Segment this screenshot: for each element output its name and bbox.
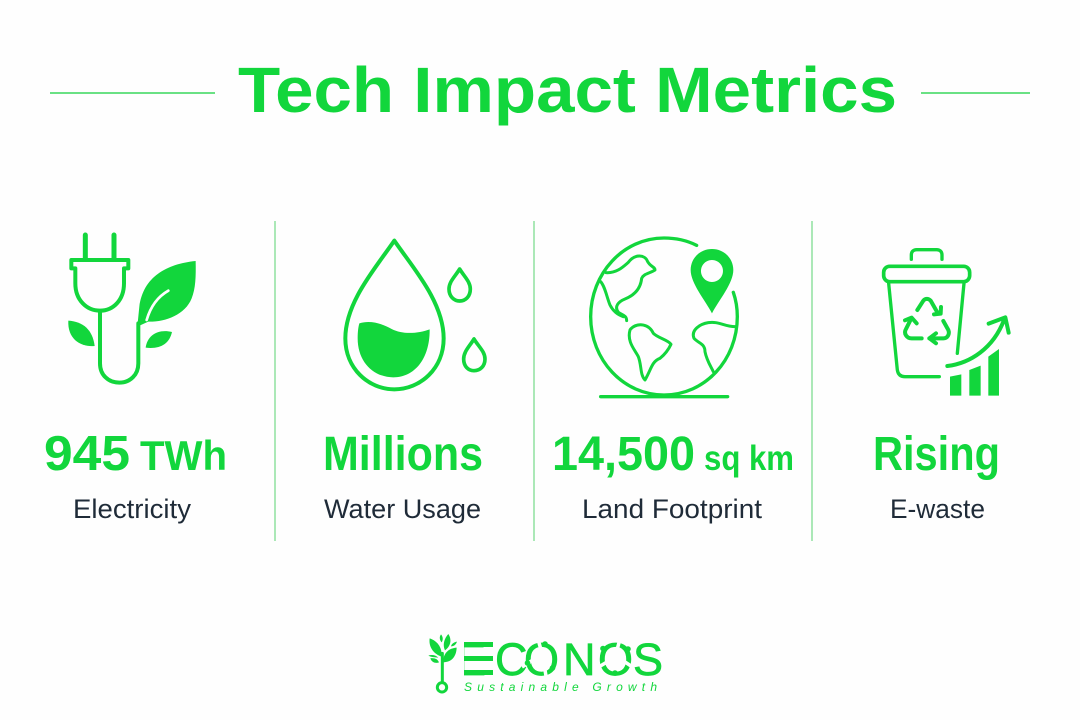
metric: electricity [44,427,227,524]
metric: land footprint [552,428,794,524]
logo wordmark: ECONOS [456,634,663,685]
logo tagline: Sustainable Growth [464,680,657,694]
metric: electricity: TWh [140,432,227,479]
metric: land footprint: 14,500 [552,428,695,481]
icon: recycling bin with rising chart [884,250,1009,396]
icon: water drops [345,241,485,389]
metric: electricity: 945 [44,427,130,481]
metric: e-waste [873,428,1000,524]
metric: water usage: Water Usage [324,494,481,524]
icon: plug with leaves [68,235,196,383]
metric: water usage: Millions [323,428,483,481]
metric: electricity: Electricity [73,494,192,524]
logo icon: sprout [428,634,457,692]
title: Tech Impact Metrics [238,54,897,126]
logo: Econos [428,634,663,694]
metric: water usage [323,428,483,524]
metric: land footprint: sq km [704,439,794,478]
metric: e-waste: Rising [873,428,1000,481]
metric: e-waste: E-waste [890,494,985,524]
icon: globe with pin [591,238,737,397]
metric: land footprint: Land Footprint [582,494,763,524]
